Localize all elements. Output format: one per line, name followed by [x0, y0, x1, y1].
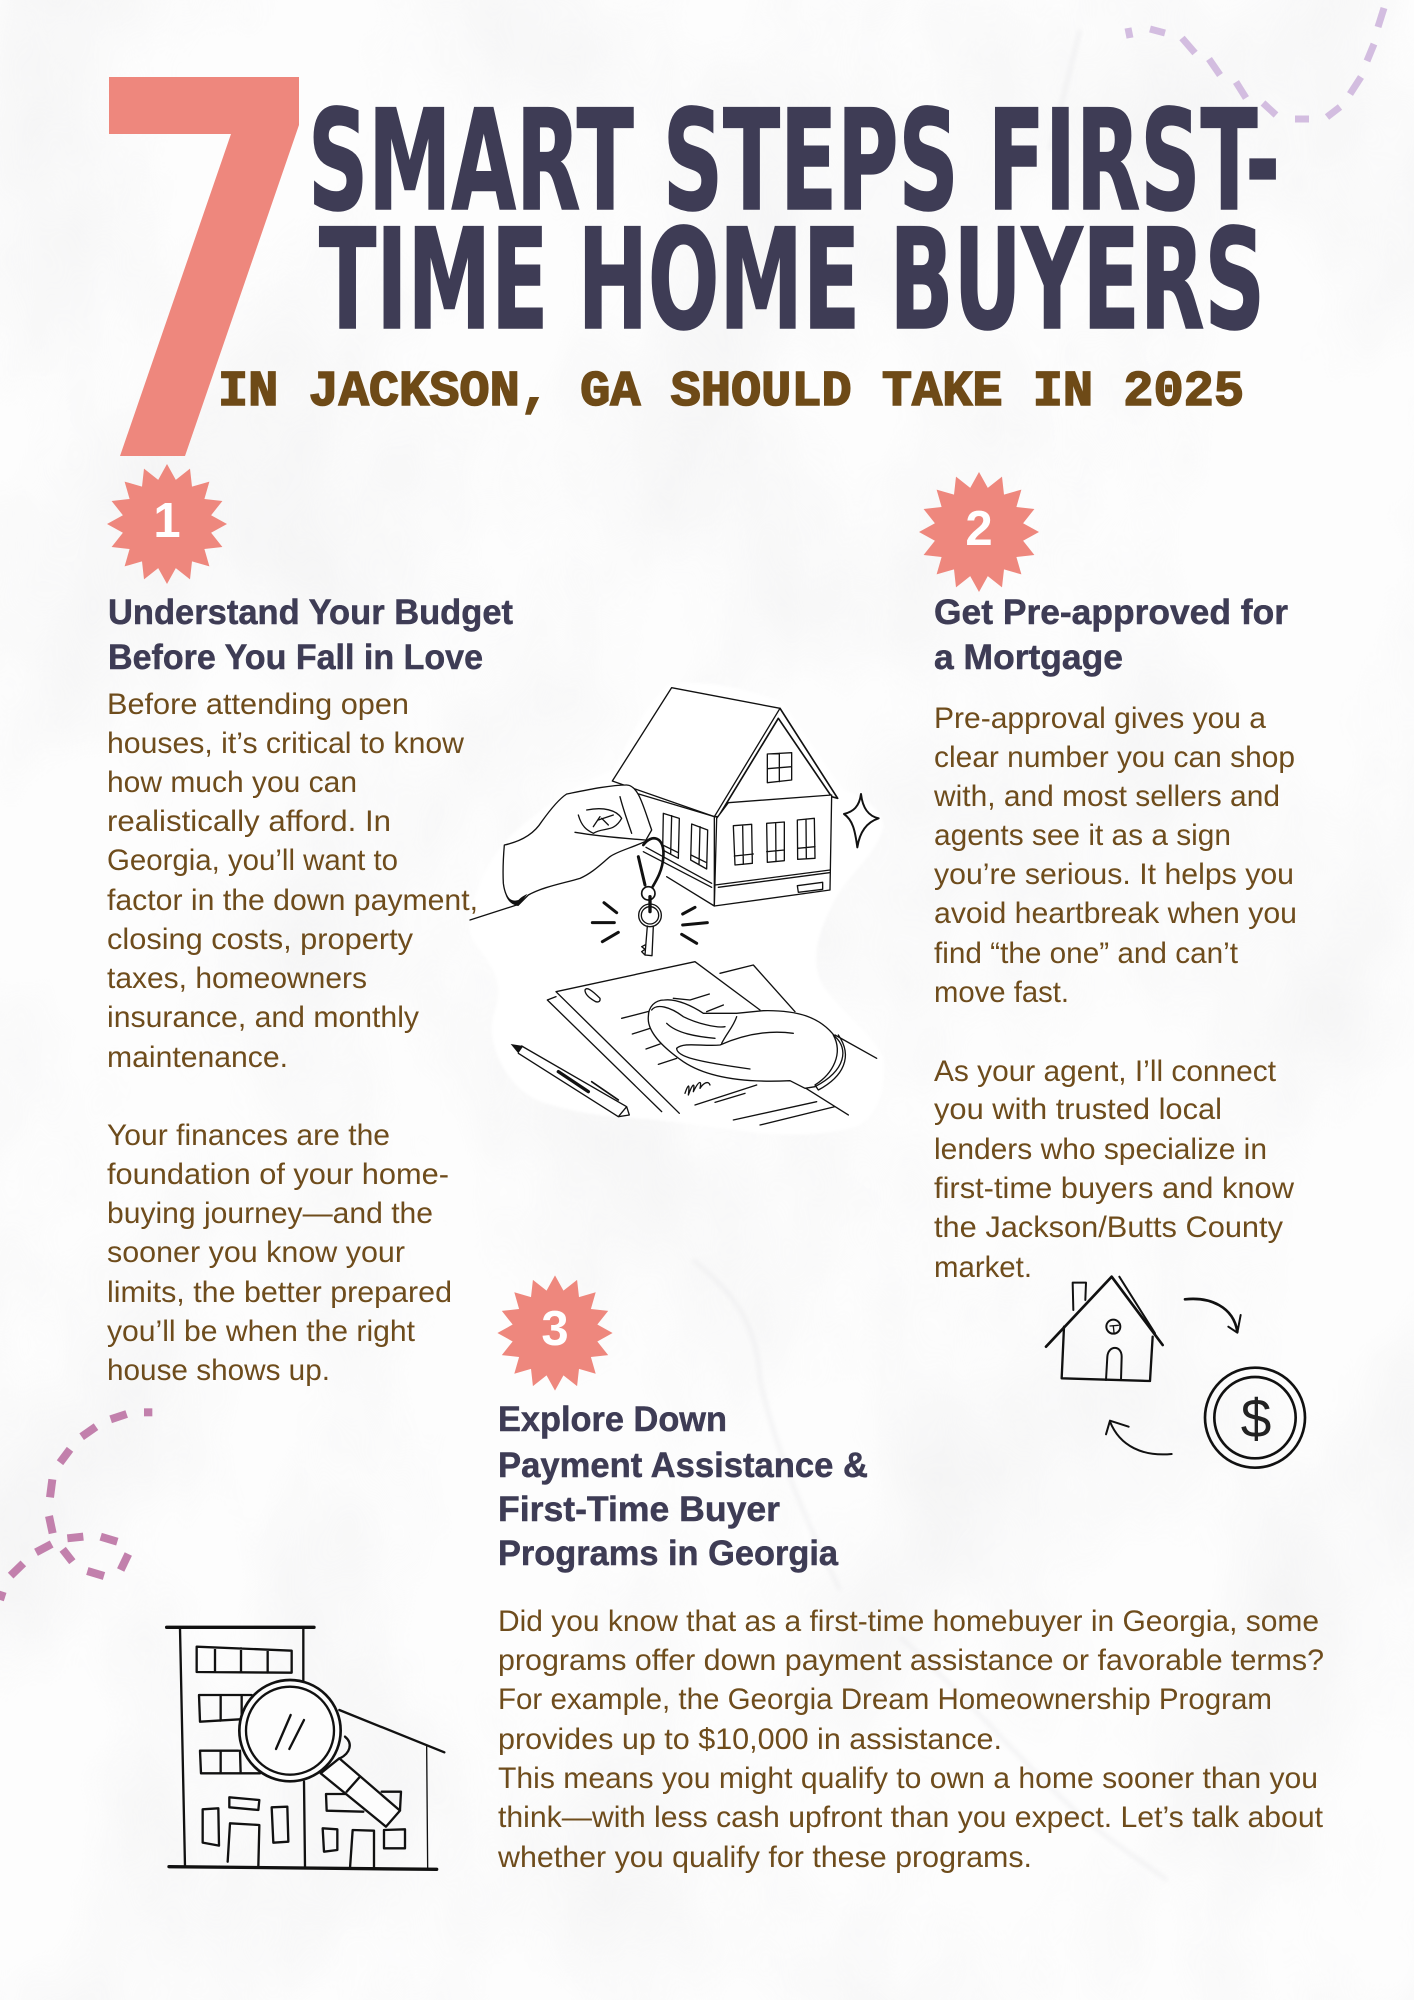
text: step 2 body: first-time buyers and know: [934, 1172, 1294, 1205]
heading: step 3: Programs in Georgia: [498, 1534, 839, 1573]
text: step 1 body: sooner you know your: [107, 1236, 405, 1269]
heading: step 2: [934, 593, 1288, 677]
text: step 1 body: insurance, and monthly: [107, 1001, 419, 1034]
text: step 2 body: lenders who specialize in: [934, 1133, 1267, 1166]
illustration: hands exchanging house key and contract: [470, 683, 884, 1135]
text: step 1 body: factor in the down payment,: [107, 884, 478, 917]
icon: house and dollar coin exchange: [1046, 1277, 1305, 1468]
heading: step 3: Payment Assistance &: [498, 1446, 868, 1485]
text: step 1 body: you’ll be when the right: [107, 1315, 416, 1348]
text: step 2 body: market.: [934, 1251, 1032, 1284]
text: step 1 body: [107, 688, 478, 1387]
text: step 3 body: This means you might qualify to own a home sooner than you: [498, 1762, 1318, 1795]
text: step 1 body: maintenance.: [107, 1041, 288, 1074]
badge: number 2: 2: [965, 502, 993, 556]
big numeral 7: [109, 77, 299, 456]
text: step 1 body: Before attending open: [107, 688, 409, 721]
badge: number 1: 1: [153, 494, 181, 548]
text: step 1 body: realistically afford. In: [107, 805, 391, 838]
text: step 2 body: As your agent, I’ll connect: [934, 1055, 1277, 1088]
text: step 2 body: avoid heartbreak when you: [934, 897, 1297, 930]
text: step 3 body: For example, the Georgia Dream Homeownership Program: [498, 1683, 1272, 1716]
text: step 3 body: think—with less cash upfront than you expect. Let’s talk about: [498, 1801, 1324, 1834]
heading: step 1: Understand Your Budget: [108, 593, 513, 632]
icon: house and dollar coin exchange: $: [1241, 1387, 1271, 1449]
text: step 2 body: Pre-approval gives you a: [934, 702, 1266, 735]
badge: number 1: [107, 464, 227, 584]
text: step 2 body: you’re serious. It helps you: [934, 858, 1294, 891]
heading: step 1: [108, 593, 513, 677]
text: step 1 body: houses, it’s critical to know: [107, 727, 464, 760]
heading: step 1: Before You Fall in Love: [108, 638, 483, 677]
text: step 1 body: closing costs, property: [107, 923, 413, 956]
text: step 2 body: you with trusted local: [934, 1093, 1222, 1126]
badge: number 3: [497, 1275, 613, 1391]
text: step 1 body: Georgia, you’ll want to: [107, 844, 398, 877]
text: step 3 body: provides up to $10,000 in assistance.: [498, 1723, 1002, 1756]
panel: step 2: [919, 472, 1297, 1284]
text: step 2 body: agents see it as a sign: [934, 819, 1231, 852]
panel: step 1: [107, 464, 513, 1387]
badge: number 3: 3: [541, 1302, 569, 1356]
panel: step 3: [497, 1275, 1324, 1874]
text: step 3 body: [497, 1605, 1324, 1874]
heading: step 2: Get Pre-approved for: [934, 593, 1288, 632]
text: step 2 body: find “the one” and can’t: [934, 937, 1239, 970]
decorative dashed line: top right: [1128, 8, 1384, 119]
text: step 3 body: programs offer down payment assistance or favorable terms?: [498, 1644, 1324, 1677]
heading: step 3: First-Time Buyer: [498, 1490, 780, 1529]
text: step 1 body: buying journey—and the: [107, 1197, 433, 1230]
text: step 1 body: how much you can: [107, 766, 357, 799]
text: step 2 body: with, and most sellers and: [933, 780, 1280, 813]
text: step 1 body: foundation of your home-: [107, 1158, 449, 1191]
text: step 3 body: Did you know that as a first-time homebuyer in Georgia, some: [498, 1605, 1319, 1638]
icon: buildings under magnifying glass: [167, 1627, 444, 1869]
text: step 2 body: the Jackson/Butts County: [934, 1211, 1283, 1244]
text: step 1 body: Your finances are the: [107, 1119, 390, 1152]
text: step 1 body: taxes, homeowners: [107, 962, 367, 995]
text: step 2 body: clear number you can shop: [934, 741, 1295, 774]
text: step 1 body: limits, the better prepared: [107, 1276, 452, 1309]
text: step 3 body: whether you qualify for these programs.: [497, 1841, 1032, 1874]
heading: step 2: a Mortgage: [934, 638, 1123, 677]
decorative dashed line: left: [0, 1412, 152, 1600]
heading: step 3: [498, 1400, 868, 1573]
badge: number 2: [919, 472, 1039, 592]
heading: step 3: Explore Down: [498, 1400, 727, 1439]
text: step 1 body: house shows up.: [107, 1354, 330, 1387]
text: step 2 body: [933, 702, 1297, 1284]
subtitle: IN JACKSON, GA SHOULD TAKE IN 2025: [218, 364, 1244, 421]
title: [308, 80, 1280, 361]
text: step 2 body: move fast.: [934, 976, 1069, 1009]
